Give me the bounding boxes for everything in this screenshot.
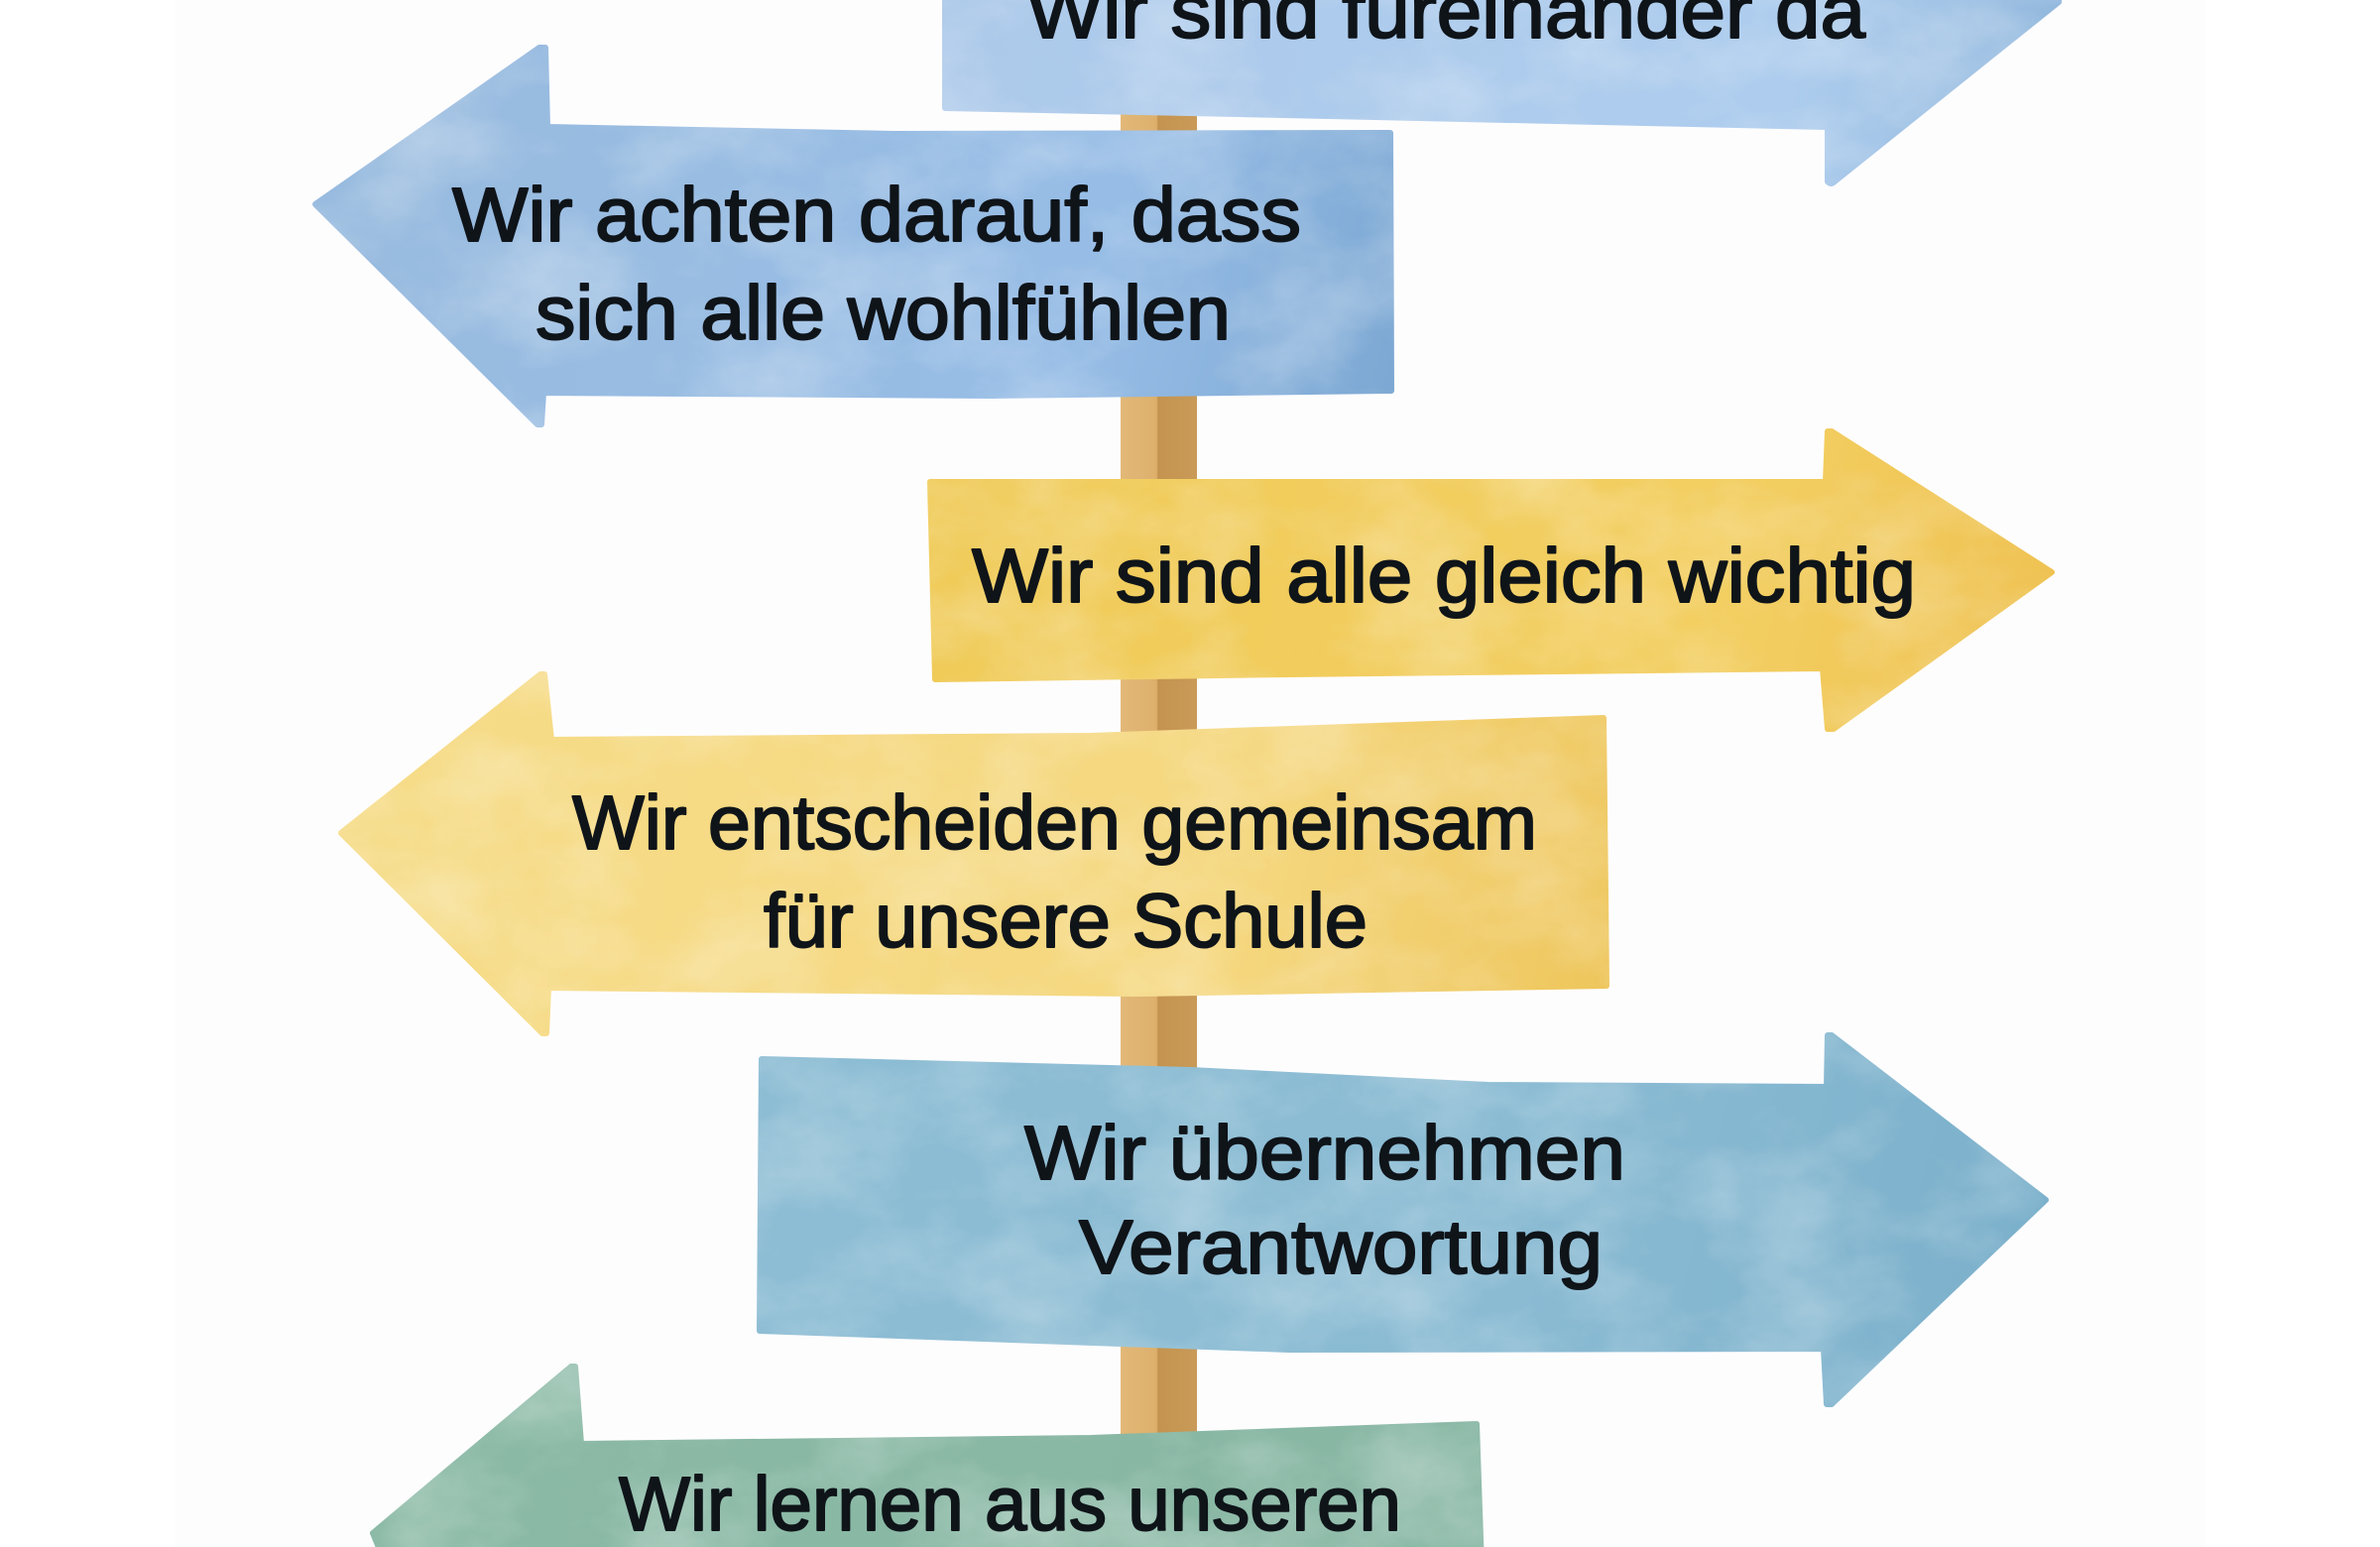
sign text line 2: für unsere Schule bbox=[764, 879, 1368, 964]
arrow shape: pale yellow, pointing left bbox=[341, 674, 1606, 1033]
arrow shape: teal blue, pointing right bbox=[760, 1035, 2046, 1404]
wooden signpost bbox=[1121, 99, 1197, 1448]
arrow shape: light blue, pointing right bbox=[945, 0, 2059, 183]
sign text: Wir sind alle gleich wichtig bbox=[972, 534, 1916, 619]
sign text line 2: sich alle wohlfühlen bbox=[536, 271, 1231, 356]
arrow: Wir übernehmen Verantwortung bbox=[760, 1035, 2046, 1404]
sign text: Wir entscheiden gemeinsam bbox=[572, 780, 1537, 866]
sign text: Wir übernehmen bbox=[1024, 1111, 1625, 1196]
arrow: Wir achten darauf, dass sich alle wohlfühlen bbox=[315, 48, 1391, 424]
arrow: Wir lernen aus unseren bbox=[373, 1367, 1482, 1547]
arrow: Wir sind alle gleich wichtig bbox=[930, 431, 2052, 729]
arrow shape: yellow, pointing right bbox=[930, 431, 2052, 729]
sign text line 2: Verantwortung bbox=[1079, 1205, 1603, 1290]
arrow shape: green, pointing left bbox=[373, 1367, 1482, 1547]
arrow shape: blue, pointing left bbox=[315, 48, 1391, 424]
arrow: Wir entscheiden gemeinsam für unsere Schule bbox=[341, 674, 1606, 1033]
sign text: Wir lernen aus unseren bbox=[619, 1462, 1401, 1547]
sign text: Wir achten darauf, dass bbox=[452, 173, 1301, 258]
arrow: Wir sind füreinander da bbox=[945, 0, 2059, 183]
